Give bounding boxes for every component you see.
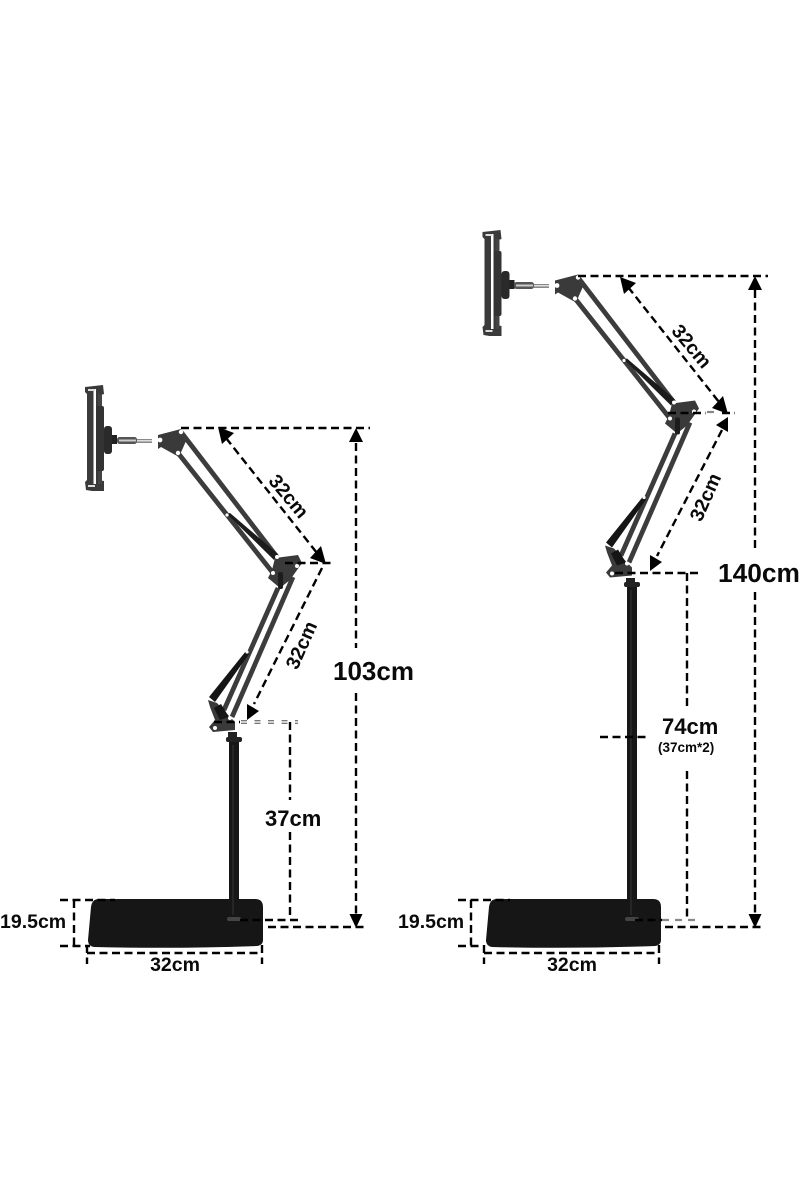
- dimension: 74cm pole: [600, 573, 718, 920]
- left dimensions: [0, 427, 414, 976]
- mounting rod: [117, 437, 152, 444]
- dimension: 103cm total height: 103cm: [333, 656, 414, 686]
- dimension: 32cm upper arm: [218, 427, 332, 564]
- dimension: 32cm lower arm: [650, 417, 728, 571]
- dimension: 103cm total height: [181, 428, 414, 928]
- elbow joint: [268, 555, 302, 589]
- dimension: 19.5cm depth: 19.5cm: [0, 911, 66, 933]
- dimension: 37cm pole: 37cm: [265, 806, 321, 831]
- lower arm: [208, 577, 293, 717]
- dimension: 32cm lower arm: 32cm: [686, 470, 726, 525]
- dimension: 140cm total height: [578, 276, 800, 928]
- dimension: 19.5cm depth: 19.5cm: [398, 911, 464, 933]
- dimension: 32cm width: 32cm: [150, 954, 200, 976]
- base bracket: [605, 546, 632, 578]
- dimension: 74cm pole: (37cm*2): [658, 740, 714, 755]
- dimension: 32cm upper arm: 32cm: [264, 470, 313, 523]
- tablet holder: [85, 385, 117, 491]
- upper arm: [555, 274, 675, 418]
- right dimensions: [398, 276, 800, 976]
- right stand: extended position: [482, 230, 699, 948]
- dimension: 19.5cm depth: [398, 900, 510, 946]
- dimension: 32cm upper arm: 32cm: [667, 320, 716, 373]
- elbow joint: [665, 400, 699, 434]
- pole: [624, 578, 640, 921]
- upper arm: [158, 429, 278, 573]
- dimension: 32cm lower arm: 32cm: [282, 618, 322, 673]
- weighted base: [88, 899, 263, 948]
- dimension: 32cm lower arm: [247, 568, 322, 720]
- pole: [226, 732, 242, 921]
- dimension: 19.5cm depth: [0, 900, 115, 946]
- dimension: 74cm pole: 74cm: [662, 714, 718, 739]
- dimension: 140cm total height: 140cm: [718, 558, 800, 588]
- weighted base: [486, 899, 661, 948]
- left stand: low position: [85, 385, 302, 948]
- dimension: 32cm width: 32cm: [547, 954, 597, 976]
- tablet holder: [482, 230, 514, 336]
- lower arm: [605, 422, 690, 562]
- mounting rod: [514, 282, 549, 289]
- dimension: 32cm upper arm: [620, 277, 735, 414]
- base bracket: [208, 700, 235, 732]
